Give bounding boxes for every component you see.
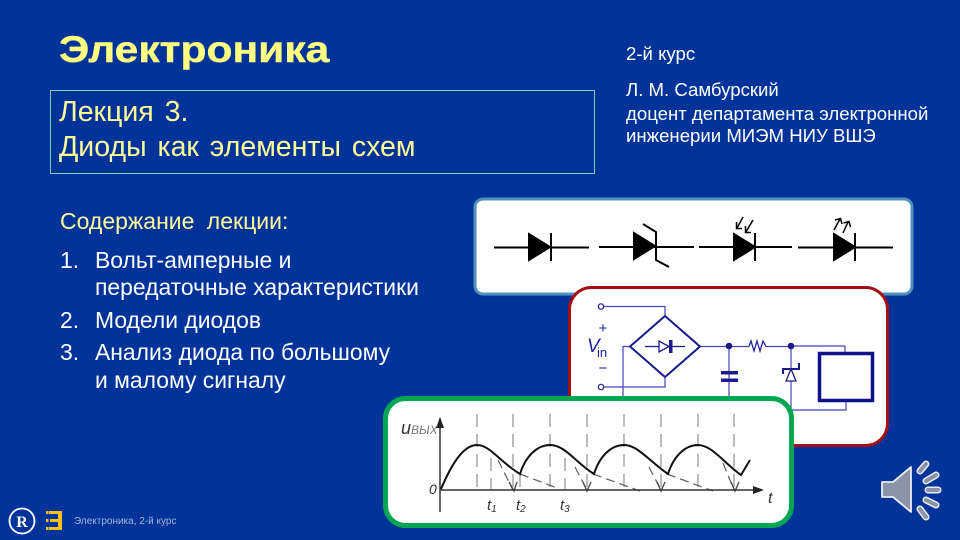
- icon: speaker: [882, 464, 938, 517]
- icon: department logo: [46, 511, 62, 530]
- panel: output voltage chart: t: [768, 490, 773, 507]
- footer text: Электроника, 2-й курс: [74, 516, 176, 527]
- icon: HSE university logo: R: [16, 514, 28, 531]
- lecture title box: Лекция 3.: [59, 96, 188, 128]
- contents list: Модели диодов: [95, 307, 261, 333]
- panel: rectifier circuit: −: [599, 360, 608, 377]
- panel: rectifier circuit: [570, 288, 888, 446]
- contents list: 1.: [60, 247, 79, 273]
- course and author info: 2-й курс: [626, 43, 695, 64]
- contents list: 2.: [60, 307, 79, 333]
- contents list: [60, 247, 419, 393]
- panel: output voltage chart: 2: [519, 504, 526, 515]
- panel: rectifier circuit: in: [597, 345, 607, 360]
- course and author info: [626, 43, 928, 146]
- panel: output voltage chart: u: [401, 418, 411, 438]
- panel: output voltage chart: [386, 398, 792, 526]
- panel: output voltage chart: t: [516, 497, 520, 514]
- panel: rectifier circuit: V: [587, 336, 602, 357]
- contents heading: Содержание лекции:: [60, 208, 288, 234]
- panel: diode symbols: [475, 199, 912, 294]
- contents list: и малому сигналу: [95, 367, 286, 393]
- course and author info: инженерии МИЭМ НИУ ВШЭ: [626, 125, 876, 146]
- contents list: Анализ диода по большому: [95, 339, 390, 365]
- panel: output voltage chart: 0: [429, 481, 437, 497]
- panel: rectifier circuit: +: [599, 320, 608, 337]
- title: Электроника: [59, 29, 329, 70]
- contents list: передаточные характеристики: [95, 274, 419, 300]
- contents list: 3.: [60, 339, 79, 365]
- panel: output voltage chart: 3: [564, 504, 570, 515]
- course and author info: Л. М. Самбурский: [626, 79, 779, 100]
- panel: output voltage chart: 1: [491, 504, 497, 515]
- icon: HSE university logo: [10, 508, 34, 534]
- course and author info: доцент департамента электронной: [626, 103, 928, 124]
- panel: output voltage chart: t: [560, 497, 564, 514]
- lecture title box: Диоды как элементы схем: [59, 130, 415, 162]
- contents list: Вольт-амперные и: [95, 247, 291, 273]
- panel: output voltage chart: ВЫХ: [411, 423, 439, 437]
- panel: output voltage chart: t: [487, 497, 491, 514]
- lecture title box: [50, 90, 595, 174]
